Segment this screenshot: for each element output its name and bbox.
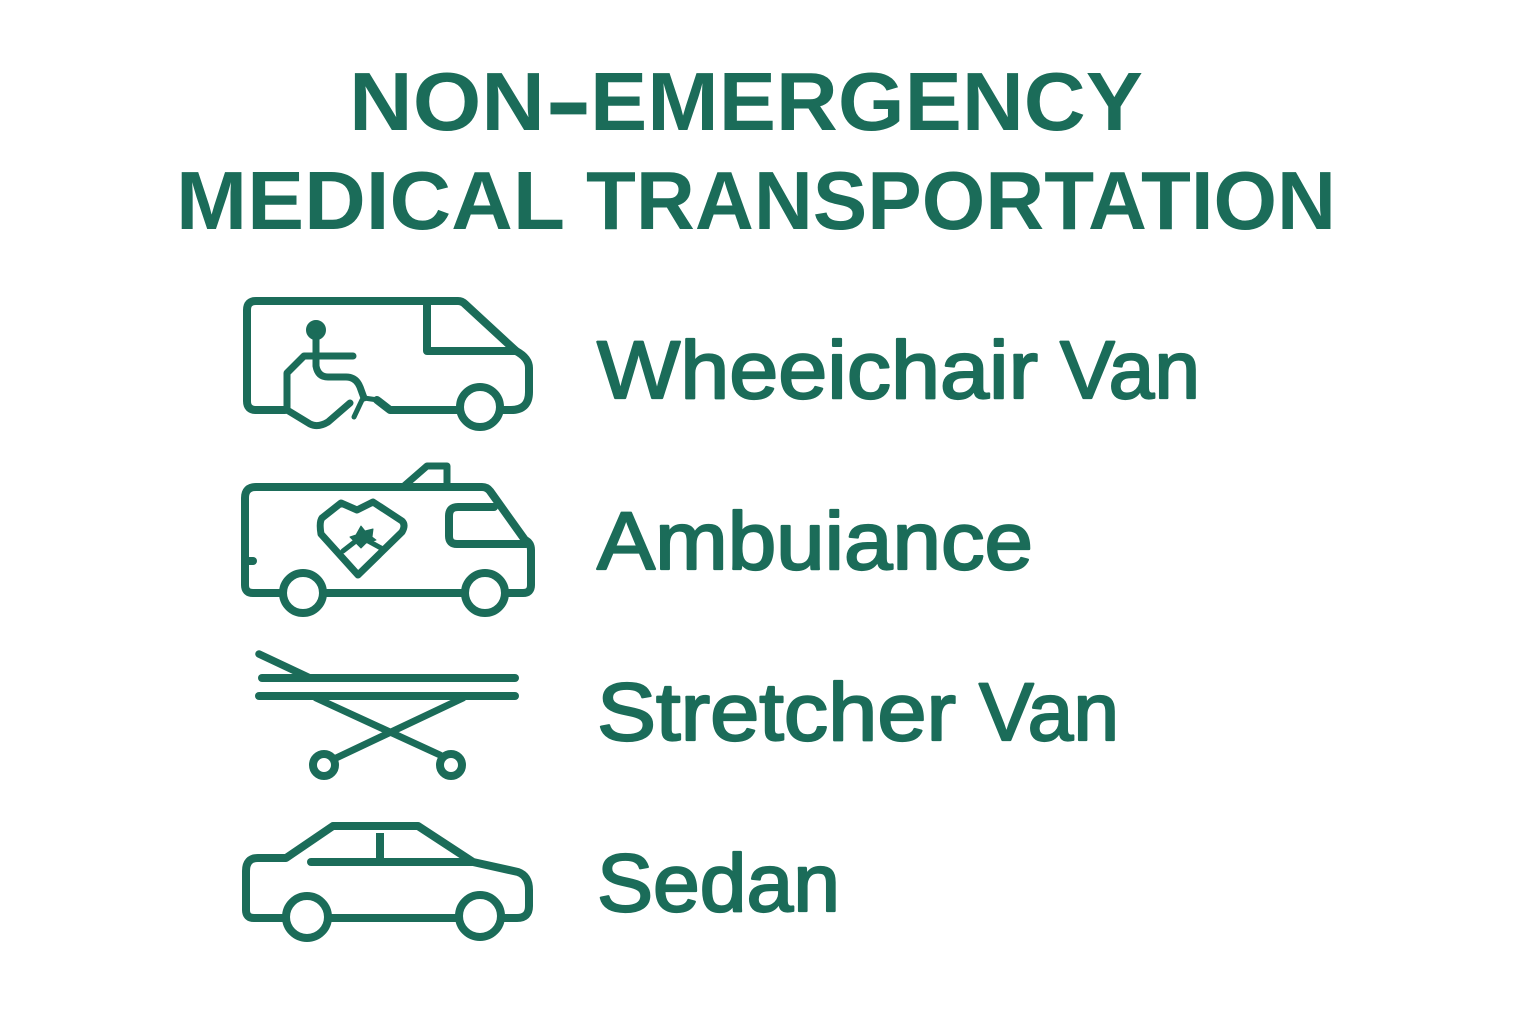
title: MEDICAL <box>176 154 565 247</box>
icon: ambulance <box>245 466 531 613</box>
label: stretcher van: Van <box>979 667 1119 758</box>
label: sedan: Sedan <box>597 838 840 929</box>
title <box>176 55 1336 247</box>
label: ambulance: Ambuiance <box>597 496 1033 587</box>
title: EMERGENCY <box>590 55 1143 148</box>
label: wheelchair van: Wheeichair <box>597 325 1038 416</box>
label: wheelchair van: Van <box>1060 325 1200 416</box>
icon: wheelchair van <box>247 301 529 427</box>
icon: sedan <box>246 826 529 938</box>
row: ambulance <box>245 466 1033 613</box>
icon: stretcher <box>259 654 515 776</box>
label: wheelchair van <box>597 325 1200 416</box>
title: - <box>547 55 590 148</box>
row: sedan <box>246 826 840 938</box>
label: stretcher van: Stretcher <box>597 667 956 758</box>
title: NON <box>349 55 545 148</box>
title: TRANSPORTATION <box>586 154 1336 247</box>
row: wheelchair van <box>247 301 1200 427</box>
label: stretcher van <box>597 667 1119 758</box>
row: stretcher van <box>259 654 1119 776</box>
